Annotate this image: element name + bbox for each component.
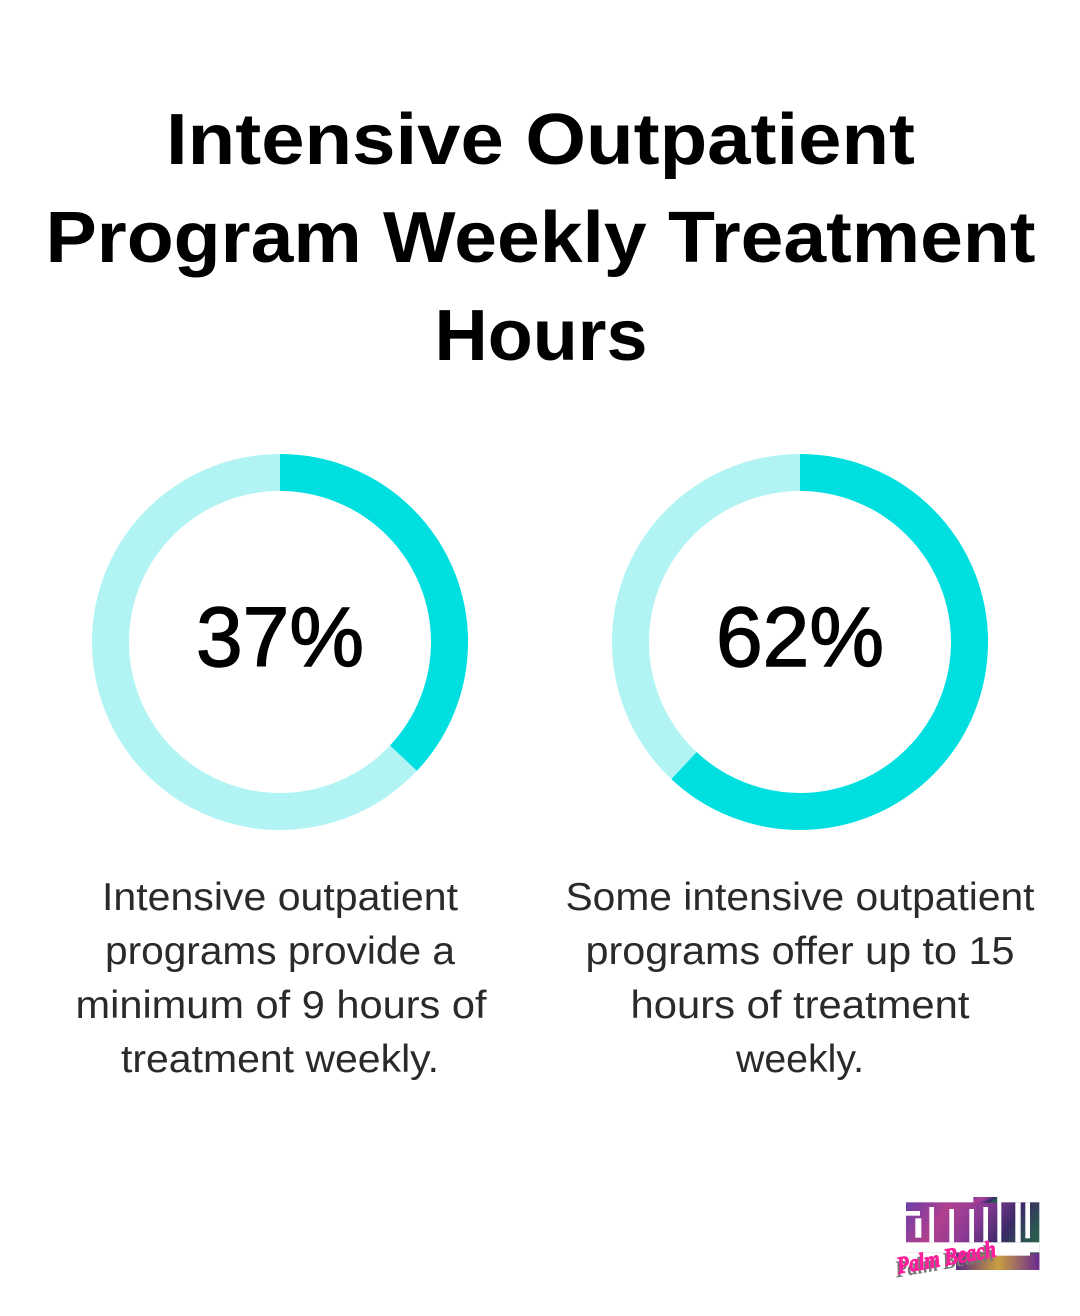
- description: 37%: minimum of 9 hours of: [76, 984, 487, 1027]
- title: Hours: [434, 296, 648, 376]
- description: 62%: hours of treatment: [630, 984, 970, 1027]
- title: [46, 100, 1036, 376]
- description: 62%: Some intensive outpatient: [566, 876, 1035, 919]
- logo script: Palm Beach: Palm Beach: [892, 1241, 996, 1284]
- donut chart: 62%: [630, 472, 970, 812]
- donut chart: 37%: [110, 472, 450, 812]
- title: Program Weekly Treatment: [46, 198, 1036, 278]
- description: 37%: [76, 876, 487, 1081]
- value: 62%: 62%: [716, 590, 884, 684]
- icon: Amity Palm Beach logo: [892, 1197, 1039, 1284]
- description: 37%: Intensive outpatient: [102, 876, 458, 919]
- description: 62%: weekly.: [735, 1038, 864, 1081]
- title: Intensive Outpatient: [166, 100, 915, 180]
- value: 37%: 37%: [196, 590, 364, 684]
- logo script: Palm Beach: Palm Beach: [894, 1237, 998, 1280]
- description: 62%: programs offer up to 15: [586, 930, 1014, 973]
- description: 62%: [566, 876, 1035, 1081]
- description: 37%: treatment weekly.: [121, 1038, 439, 1081]
- description: 37%: programs provide a: [105, 930, 455, 973]
- panel: 37% statistic: [76, 472, 487, 1081]
- panel: 62% statistic: [566, 472, 1035, 1081]
